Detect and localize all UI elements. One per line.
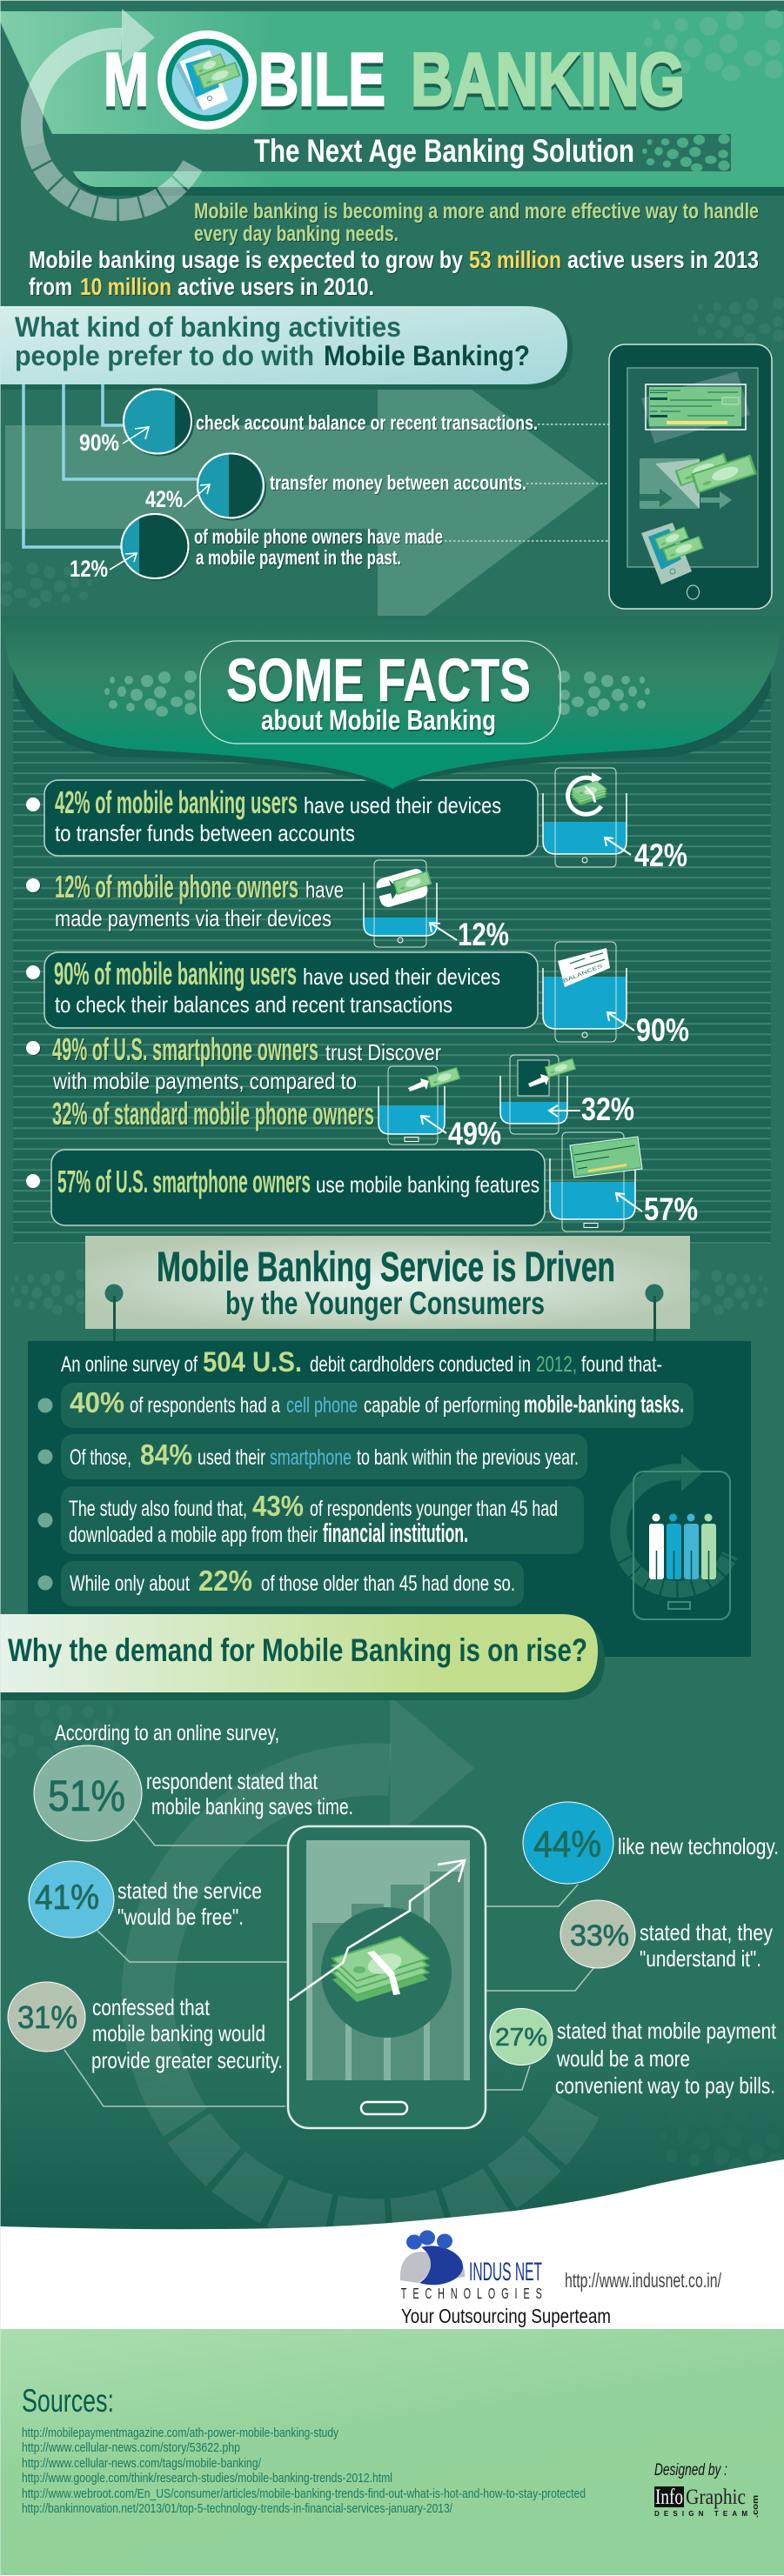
phone gauge: 32 percent — [500, 1055, 634, 1134]
row: 40 percent: cell phone — [286, 1393, 358, 1418]
logo: Indus Net Technologies: TECHNOLOGIES — [401, 2286, 542, 2303]
logo: Indus Net Technologies — [400, 2230, 542, 2303]
icon: phone with four people — [619, 1454, 730, 1619]
pie: 90 percent — [79, 390, 194, 456]
survey intro: debit cardholders conducted in — [310, 1352, 531, 1377]
tagline: Your Outsourcing Superteam — [401, 2305, 611, 2327]
stat: 27 percent — [490, 2009, 777, 2099]
title: Mobile Banking: BILE — [258, 38, 385, 122]
stat: 51 percent: 51% — [48, 1772, 125, 1820]
row: 22 percent: of those older than 45 had done so. — [261, 1572, 515, 1596]
row: 40 percent: 40% — [70, 1386, 124, 1418]
fact: 12 percent: made payments via their devices — [55, 905, 332, 931]
white footer band — [0, 2159, 784, 2331]
designer credit: Designed by : — [654, 2461, 727, 2479]
row: 43 percent: The study also found that, — [69, 1497, 247, 1521]
phone gauge: 57 percent: 57% — [644, 1191, 698, 1227]
row: 84 percent: used their — [198, 1445, 265, 1470]
phone gauge: 42 percent — [543, 768, 687, 873]
designer credit — [654, 2461, 760, 2518]
panel: survey results — [28, 1341, 751, 1657]
row: 84 percent: smartphone — [270, 1445, 352, 1470]
row: 43 percent: of respondents younger than 45 had — [310, 1497, 558, 1521]
heading bubble: banking activities: people prefer to do with — [15, 340, 314, 371]
row: 84 percent: Of those, — [70, 1445, 131, 1470]
icon: balance document — [558, 948, 610, 987]
activity labels: a mobile payment in the past. — [196, 546, 401, 569]
phone gauge: 57 percent — [550, 1132, 698, 1231]
stat: 31 percent: 31% — [17, 1999, 77, 2035]
icon: letter O with phone and money — [157, 30, 257, 130]
usage growth statement: Mobile banking usage is expected to grow by — [29, 246, 463, 273]
sources panel: http://mobilepaymentmagazine.com/ath-power-mobile-banking-study — [22, 2426, 338, 2440]
usage growth statement — [29, 246, 759, 300]
phone gauge: 90 percent: 90% — [636, 1012, 689, 1048]
fact: 12 percent — [26, 869, 344, 931]
designer credit: DESIGN TEAM — [654, 2510, 747, 2518]
fact box: 42 percent: to transfer funds between accounts — [55, 820, 355, 846]
icon: cheque — [641, 371, 750, 444]
sources panel: http://www.cellular-news.com/story/53622.php — [22, 2440, 240, 2455]
row: 22 percent — [38, 1561, 524, 1606]
icon: mobile payment — [641, 523, 704, 584]
fact box: 57 percent: use mobile banking features — [316, 1171, 539, 1198]
phone gauge: 90 percent — [543, 942, 689, 1048]
stat: 44 percent: 44% — [533, 1824, 601, 1865]
stat: 41 percent: stated the service — [117, 1878, 262, 1904]
pie: 12 percent: 12% — [70, 556, 108, 582]
subtitle: The Next Age Banking Solution — [254, 133, 634, 169]
icon: balance document: BALANCES — [563, 964, 603, 984]
icon: cheque — [570, 1137, 642, 1178]
sources panel: http://www.google.com/think/research-studies/mobile-banking-trends-2012.html — [22, 2471, 392, 2486]
leader lines to central phone — [64, 1819, 594, 2106]
usage growth statement: from — [29, 273, 72, 300]
usage growth statement: 53 million — [469, 246, 561, 273]
row: 22 percent: While only about — [70, 1572, 190, 1596]
heading banner: younger consumers — [85, 1236, 690, 1329]
header banner — [0, 0, 784, 196]
stat: 41 percent: 41% — [35, 1879, 99, 1917]
connector lines to pies — [23, 384, 199, 547]
stat: 31 percent: provide greater security. — [91, 2047, 283, 2073]
sources panel: http://www.cellular-news.com/tags/mobile-banking/ — [22, 2456, 262, 2471]
usage growth statement: active users in 2010. — [178, 273, 374, 300]
fact box: 42 percent: have used their devices — [304, 792, 501, 818]
fact box: 90 percent: have used their devices — [303, 964, 500, 990]
designer credit: Info — [655, 2486, 683, 2509]
fact box: 42 percent — [26, 780, 538, 856]
row: 43 percent: downloaded a mobile app from their — [69, 1523, 318, 1547]
fact box: 90 percent: 90% of mobile banking users — [54, 956, 297, 991]
phone gauge: 49 percent: 49% — [448, 1116, 501, 1151]
row: 84 percent — [38, 1434, 587, 1479]
activity labels: check account balance or recent transactions. — [196, 411, 538, 434]
fact: 12 percent: 12% of mobile phone owners — [55, 869, 298, 904]
phone gauge: 49 percent — [379, 1066, 501, 1151]
stat: 33 percent: 33% — [570, 1919, 629, 1952]
designer credit: Graphic — [686, 2486, 746, 2509]
bar chart — [312, 1872, 464, 2080]
heading bubble: demand for mobile banking: Why the demand for Mobile Banking is on rise? — [8, 1632, 587, 1668]
phone gauge: 12 percent — [364, 860, 509, 952]
row: 43 percent: financial institution. — [323, 1518, 468, 1548]
survey intro: 2012, — [536, 1352, 577, 1377]
fact: 49 and 32 percent: 32% of standard mobile phone owners — [52, 1096, 374, 1131]
icon: card with money — [374, 867, 432, 909]
fact: 12 percent: have — [305, 877, 344, 903]
sources panel: Sources: — [22, 2383, 114, 2419]
sources panel: http://bankinnovation.net/2013/01/top-5-technology-trends-in-financial-services-january-2013/ — [22, 2501, 453, 2516]
title: Mobile Banking — [104, 38, 685, 122]
icon: circular arrow behind title — [31, 9, 193, 210]
facts stripes background — [13, 674, 771, 1245]
icon: circular arrow with money — [568, 772, 606, 814]
logo: Indus Net Technologies: INDUS NET — [469, 2258, 542, 2286]
fact: 49 and 32 percent: 49% of U.S. smartphone owners — [52, 1031, 318, 1067]
stat: 31 percent: mobile banking would — [92, 2020, 265, 2046]
heading banner: younger consumers: by the Younger Consumers — [225, 1285, 545, 1321]
fact: 49 and 32 percent: trust Discover — [325, 1039, 441, 1065]
row: 84 percent: 84% — [140, 1438, 192, 1471]
activity labels: transfer money between accounts. — [270, 471, 526, 494]
phone gauge: 32 percent: 32% — [581, 1091, 634, 1127]
heading bubble: banking activities: What kind of banking activities — [15, 311, 401, 343]
phone gauge: 12 percent: 12% — [458, 917, 509, 952]
fact box: 90 percent: to check their balances and recent transactions — [55, 991, 452, 1018]
stat: 41 percent — [29, 1861, 262, 1938]
stat: 51 percent: respondent stated that — [146, 1768, 318, 1794]
icon: arrow and banknote — [408, 1067, 460, 1091]
sources panel: http://www.webroot.com/En_US/consumer/articles/mobile-banking-trends-find-out-what-is-hot-and-how-to-stay-protected — [22, 2486, 586, 2501]
designer credit: .com — [751, 2495, 760, 2518]
title: Mobile Banking: M — [104, 38, 149, 122]
stat: 33 percent — [560, 1900, 773, 1972]
row: 43 percent — [38, 1486, 584, 1554]
lobe: some facts heading — [0, 616, 784, 789]
heading bubble: banking activities — [0, 306, 573, 390]
fact box: 57 percent: 57% of U.S. smartphone owners — [57, 1164, 311, 1199]
fact box: 42 percent: 42% of mobile banking users — [55, 784, 298, 820]
stat: 27 percent: would be a more — [556, 2045, 690, 2072]
row: 22 percent: 22% — [198, 1565, 252, 1597]
stat: 41 percent: "would be free". — [117, 1904, 244, 1930]
intro text: every day banking needs. — [194, 222, 399, 246]
usage growth statement: 10 million — [80, 273, 171, 300]
stat: 31 percent: confessed that — [92, 1994, 211, 2020]
pie: 42 percent — [145, 454, 266, 520]
lobe: some facts heading: about Mobile Banking — [261, 704, 496, 736]
activity labels: of mobile phone owners have made — [194, 525, 443, 548]
arrow: rising trend — [290, 1860, 465, 2000]
activity labels — [194, 411, 538, 569]
background arrow: activities — [0, 297, 784, 616]
row: 43 percent: 43% — [252, 1490, 304, 1522]
title: Mobile Banking: BANKING — [411, 38, 685, 122]
section dots: younger consumers — [10, 1269, 767, 1315]
stat: 44 percent — [523, 1802, 779, 1884]
stat: 27 percent: 27% — [495, 2024, 547, 2052]
fact: 49 and 32 percent — [26, 1031, 441, 1131]
pie: 90 percent: 90% — [79, 430, 119, 456]
phone gauge: 42 percent: 42% — [634, 838, 687, 873]
dotted leader lines — [445, 424, 640, 541]
row: 40 percent: capable of performing — [364, 1393, 520, 1418]
stat: 51 percent — [34, 1745, 353, 1841]
central phone: growth chart with money — [288, 1826, 486, 2128]
icon: money stack — [332, 1937, 428, 2002]
pie: 12 percent — [70, 514, 191, 582]
survey intro: An online survey of — [61, 1352, 198, 1377]
stat: 51 percent: mobile banking saves time. — [151, 1793, 353, 1819]
icon: transfer money — [640, 453, 757, 509]
intro text — [194, 199, 759, 246]
row: 40 percent: mobile-banking tasks. — [524, 1391, 684, 1418]
row: 40 percent: of respondents had a — [130, 1393, 280, 1418]
icon: arrow and banknote — [528, 1058, 576, 1087]
left edge line — [0, 0, 1, 2576]
fact: 49 and 32 percent: with mobile payments, compared to — [52, 1068, 357, 1094]
banner pins — [104, 1284, 663, 1343]
heading bubble: banking activities: Mobile Banking? — [324, 340, 530, 371]
row: 84 percent: to bank within the previous year. — [357, 1445, 579, 1470]
sources panel — [0, 2329, 784, 2575]
survey intro: found that- — [581, 1352, 662, 1377]
fact box: 57 percent — [26, 1150, 545, 1225]
heading bubble: demand for mobile banking — [0, 1614, 605, 1700]
pie: 42 percent: 42% — [145, 486, 183, 512]
survey intro — [61, 1346, 662, 1378]
lobe: some facts heading: SOME FACTS — [226, 646, 531, 714]
row: 40 percent — [38, 1383, 694, 1428]
phone illustration: activities — [609, 344, 772, 609]
survey intro: 504 U.S. — [203, 1346, 302, 1378]
survey intro line: According to an online survey, — [55, 1721, 279, 1745]
stat: 31 percent — [8, 1982, 283, 2073]
fact box: 90 percent — [26, 952, 538, 1028]
background arrow: demand section — [0, 1696, 784, 2261]
